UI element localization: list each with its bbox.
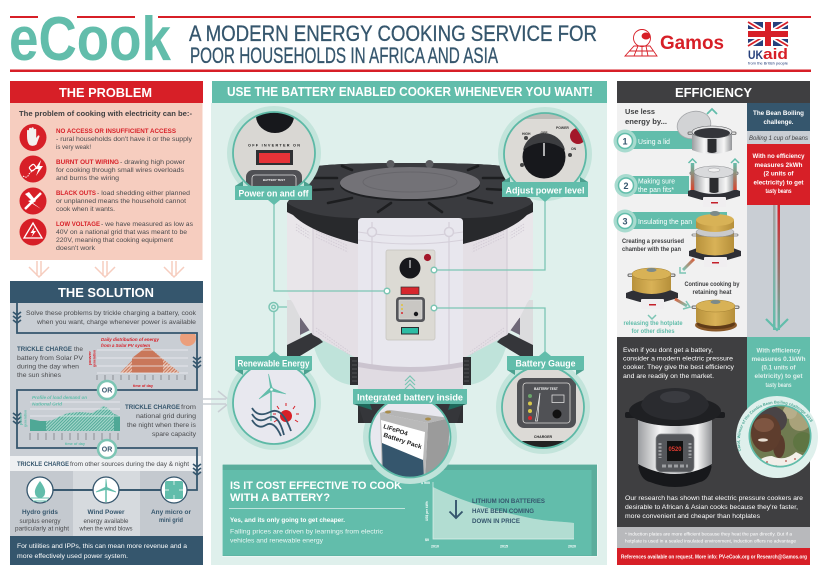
step 2: pan fits: the pan fits* xyxy=(638,187,674,194)
chart: solar distribution: from a Solar PV system xyxy=(101,343,150,348)
illustration: pan on trivet xyxy=(692,300,739,332)
illustration: cooker xyxy=(287,160,533,423)
box: with efficiency xyxy=(747,337,810,422)
text: research: more convenient and cheaper than hotplates xyxy=(625,513,761,520)
text: trickle grid: from xyxy=(181,404,197,411)
text: cost answer: Falling prices are driven by learnings from electric xyxy=(230,528,384,536)
text: trickle solar xyxy=(17,346,84,379)
box: with efficiency: tasty beans xyxy=(766,382,792,389)
logo: UK aid: UK xyxy=(748,48,763,62)
text: use less energy xyxy=(625,107,667,126)
label: hydro grids: particularly at night xyxy=(15,526,69,532)
badge: or xyxy=(98,381,116,399)
chevrons xyxy=(13,312,201,475)
text: lithium: HAVE BEEN COMING xyxy=(472,508,534,515)
text: low voltage xyxy=(56,221,194,252)
logo wordmark: eCook: eCook xyxy=(9,5,171,74)
callout: adjust power level: Adjust power level xyxy=(506,186,584,196)
text: no access: - rural households don't have it or the supply xyxy=(56,136,193,143)
heading: efficiency: EFFICIENCY xyxy=(675,86,753,100)
text: trickle solar: battery from Solar PV xyxy=(17,355,84,362)
callout: integrated battery xyxy=(353,389,467,484)
text: pressurised chamber xyxy=(622,239,684,253)
arrow: to retained heat xyxy=(680,259,694,273)
icon: down arrow xyxy=(450,500,462,518)
text: black outs: - load shedding either planned xyxy=(97,190,190,197)
text: lithium xyxy=(472,498,545,525)
arrow: energy reduction xyxy=(766,205,788,330)
box: no efficiency xyxy=(747,144,810,205)
text: other sources: TRICKLE CHARGE xyxy=(17,461,69,468)
step 3: insulating xyxy=(614,210,741,267)
connector: adjust xyxy=(431,197,545,273)
box: no efficiency: measures 2kWh xyxy=(754,162,803,169)
text: trickle grid: TRICKLE CHARGE xyxy=(125,404,180,411)
label: hydro grids: Hydro grids xyxy=(22,509,58,516)
text: cost answer: Yes, and its only going to get cheaper. xyxy=(230,517,345,524)
intro text xyxy=(26,310,197,326)
note: induction plates: hotplate is used in a sealed insulated environment, induction offers no advantage xyxy=(625,538,797,544)
text: burnt out wiring: and burns the wiring xyxy=(56,175,119,182)
text: pressure cooker intro: consider a modern electric pressure xyxy=(623,356,733,362)
arrow: to trivet xyxy=(675,299,690,309)
icon: wind and sun xyxy=(252,374,299,436)
text: use less energy: energy by... xyxy=(625,117,667,126)
text: pressurised chamber: Creating a pressurised xyxy=(622,239,684,245)
text: pressure cooker intro: and are readily on the market. xyxy=(623,373,714,380)
badge: or xyxy=(98,440,116,458)
chart: national grid demand: time of day xyxy=(65,441,86,446)
callout: battery gauge xyxy=(496,351,590,454)
headline: POOR HOUSEHOLDS IN AFRICA AND ASIA xyxy=(190,43,498,68)
icon: wind xyxy=(93,477,119,503)
step 2: pan fits: 2 xyxy=(623,181,629,191)
headline xyxy=(189,21,597,68)
text: cost answer xyxy=(230,517,384,544)
chart: battery price: US$ per kWh xyxy=(425,501,429,521)
text: other sources xyxy=(17,461,189,468)
arrow: into renewable xyxy=(203,391,231,412)
illustration: electric pressure cooker: 0520 xyxy=(668,446,682,453)
connector: renewable xyxy=(269,302,287,356)
side vents xyxy=(296,224,524,355)
note: induction plates xyxy=(617,527,810,548)
intro text: when you want, charge whenever power is available xyxy=(36,319,196,326)
connector xyxy=(53,489,161,491)
icon: hydro xyxy=(27,477,53,503)
step 2: pan fits: Making sure xyxy=(638,178,675,186)
text: burnt out wiring: for cooking through small wires overloads xyxy=(56,167,185,174)
photo: bean boiling winner: Carol, Winner of the Zambia Bean Boiling challenge 2018 xyxy=(736,400,813,452)
text: research xyxy=(625,495,803,520)
label: wind power: energy available xyxy=(84,518,129,525)
panel: the solution xyxy=(10,281,203,565)
box: with efficiency: With efficiency xyxy=(756,348,801,354)
text: no access: is very weak! xyxy=(56,144,91,151)
chart: battery price: 2015 xyxy=(500,544,508,548)
box: no efficiency: (2 units of xyxy=(764,170,794,178)
heading: the problem: THE PROBLEM xyxy=(59,86,152,100)
text: use less energy: Use less xyxy=(625,107,655,116)
label: hydro grids: surplus energy xyxy=(20,518,61,525)
footer: utilities xyxy=(10,536,203,565)
text: trickle solar: TRICKLE CHARGE xyxy=(17,346,72,353)
text: continue cooking: Continue cooking by xyxy=(684,282,740,288)
callout: adjust power level: ON xyxy=(571,147,577,151)
box: no efficiency: tasty beans xyxy=(766,188,792,195)
panel: cooker xyxy=(203,81,607,565)
text: pressure cooker intro: Even if you dont get a battery, xyxy=(623,347,713,354)
text: bean challenge: challenge. xyxy=(764,119,794,126)
text: research: desirable to African & Asian cooks because they're faster, xyxy=(625,504,798,511)
chart: solar distribution: generation xyxy=(92,349,96,367)
icon: burnt wire xyxy=(20,156,46,182)
text: other sources: from other sources during the day & night xyxy=(70,461,189,468)
text: trickle grid: spare capacity xyxy=(152,431,197,438)
callout: battery gauge: BATTERY TEST xyxy=(534,387,558,391)
step 3: insulating: 3 xyxy=(622,216,628,226)
text: pressure cooker intro xyxy=(623,347,735,380)
illustration: retained heat pan xyxy=(626,268,678,309)
icon: low voltage xyxy=(20,218,46,246)
band: other sources xyxy=(10,456,201,471)
photo: bean boiling winner xyxy=(736,396,818,478)
footer: utilities: more effectively used power system. xyxy=(17,553,128,560)
panel: the problem xyxy=(10,81,203,260)
chevrons: battery up xyxy=(405,376,415,389)
chart: solar distribution: power xyxy=(88,350,92,365)
text: trickle grid xyxy=(125,404,197,438)
illustration: insulated pan xyxy=(689,211,741,267)
label: hydro grids xyxy=(15,509,69,532)
text: pressurised chamber: chamber with the pan xyxy=(622,247,681,253)
text: trickle solar: the xyxy=(74,346,83,353)
heading: cost effective: WITH A BATTERY? xyxy=(230,492,330,504)
logo: UK aid: aid xyxy=(763,46,788,63)
callout: power on and off xyxy=(227,99,321,205)
chart: battery price: 2010 xyxy=(431,544,439,548)
text: burnt out wiring: BURNT OUT WIRING xyxy=(56,159,119,166)
step 1: using a lid xyxy=(614,108,736,154)
callout: adjust power level: OFF xyxy=(541,131,547,135)
label: micro grid: mini grid xyxy=(159,517,183,524)
text: black outs: BLACK OUTS xyxy=(56,190,97,197)
illustration: pan on hob xyxy=(688,159,740,207)
logo: Gamos xyxy=(625,30,724,56)
chart: national grid demand: generation xyxy=(24,409,28,427)
text: cost answer: vehicles and renewable energy xyxy=(230,538,324,544)
text: continue cooking xyxy=(684,282,740,296)
connector: gauge xyxy=(431,305,545,356)
text: pressure cooker intro: cooker. They give the best efficiency xyxy=(623,364,735,371)
flow line xyxy=(17,303,197,490)
badge: or: OR xyxy=(102,446,112,454)
box: with efficiency: eletricity) to get xyxy=(754,373,803,380)
callout: power on and off: BATTERY TEST xyxy=(263,178,285,182)
intro text: The problem of cooking with electricity can be:- xyxy=(19,109,193,118)
callout: integrated battery: Battery Pack xyxy=(382,432,423,451)
text: black outs: or unplanned means the household cannot xyxy=(56,198,186,205)
badge: or: OR xyxy=(102,388,112,394)
chart: national grid demand: Profile of load demand on xyxy=(32,395,87,400)
text: continue cooking: retaining heat xyxy=(692,290,732,296)
text: no access xyxy=(56,128,193,151)
chart: national grid demand xyxy=(19,395,120,446)
heading: cost effective xyxy=(230,480,402,504)
chart: solar distribution: time of day xyxy=(133,383,154,388)
logo: UK aid xyxy=(748,22,788,66)
control panel xyxy=(386,250,435,340)
callout: adjust power level xyxy=(498,107,592,202)
icon: micro grid xyxy=(161,477,187,503)
logo: UK aid: from the British people xyxy=(748,62,788,66)
label: micro grid: Any micro or xyxy=(151,509,191,516)
title xyxy=(9,5,811,74)
box: no efficiency: With no efficiency xyxy=(752,153,805,160)
chart: national grid demand: power xyxy=(19,412,23,425)
callout: adjust power level: HIGH xyxy=(522,132,531,136)
text: releasing the hotplate xyxy=(624,321,683,335)
text: trickle solar: the sun shines xyxy=(17,372,62,379)
chart: battery price xyxy=(421,481,576,548)
footer: references xyxy=(617,548,810,565)
text: low voltage: LOW VOLTAGE xyxy=(56,221,101,228)
icon: black out xyxy=(20,188,46,214)
panel: efficiency xyxy=(614,81,810,337)
label: wind power: Wind Power xyxy=(88,509,125,516)
text: black outs xyxy=(56,190,190,213)
callout: renewable energy xyxy=(227,351,321,450)
source cell backgrounds xyxy=(10,471,203,536)
text: low voltage: 220V, meaning that cooking equipment xyxy=(56,237,173,244)
heading: the solution: THE SOLUTION xyxy=(58,286,154,300)
footer: references: References available on request. More info: PV-eCook.org or Research@Gamos.org xyxy=(621,554,807,560)
chart: national grid demand: National Grid xyxy=(32,402,62,406)
text: black outs: cook when it wants. xyxy=(56,206,115,213)
heading: cost effective: IS IT COST EFFECTIVE TO COOK xyxy=(230,480,402,492)
callout: power on and off: Power on and off xyxy=(238,188,309,198)
callout: battery gauge: CHARGER xyxy=(534,435,552,439)
text: releasing the hotplate: releasing the hotplate xyxy=(624,321,683,327)
illustration: pan with lid xyxy=(674,108,736,154)
text: trickle grid: the night when there is xyxy=(127,422,197,429)
chart: solar distribution: Daily distribution of energy xyxy=(101,337,159,342)
step 3: insulating: Insulating the pan xyxy=(638,219,692,226)
text: bean challenge xyxy=(753,110,804,126)
step 1: using a lid: Using a lid xyxy=(638,139,670,146)
text: releasing the hotplate: for other dishes xyxy=(632,329,675,335)
box: no efficiency: electricity) to get xyxy=(754,180,804,186)
footer: utilities: For utilities and IPPs, this can mean more revenue and a xyxy=(17,543,187,550)
step 2: pan fits xyxy=(614,159,740,207)
box: with efficiency: (0.1 units of xyxy=(762,364,796,372)
text: burnt out wiring xyxy=(56,159,186,182)
chart: battery price: $ 900 xyxy=(421,481,430,485)
connector: power xyxy=(274,200,390,294)
text: low voltage: 40V on a national grid that was meant to be xyxy=(56,229,187,236)
label: micro grid xyxy=(151,509,191,524)
column: bean boiling xyxy=(747,103,810,337)
text: trickle solar: during the day when xyxy=(17,364,79,370)
callout: power on and off: OFF INVERTER ON xyxy=(248,144,300,148)
box: with efficiency: measures 0.1kWh xyxy=(752,356,806,363)
callout: integrated battery: Integrated battery inside xyxy=(357,392,463,402)
note: induction plates: * Induction plates are more efficient because they heat the pan directly. But if a xyxy=(625,532,793,536)
arrow: release hotplate xyxy=(648,310,656,319)
callout: renewable energy: Renewable Energy xyxy=(238,358,310,368)
text: low voltage: - we have measured as low as xyxy=(101,221,194,228)
label: wind power xyxy=(79,509,133,532)
label: wind power: when the wind blows xyxy=(79,526,133,532)
callout: integrated battery: LiFePO4 xyxy=(382,423,409,438)
chart: battery price: 2020 xyxy=(568,544,576,548)
callout: adjust power level: POWER xyxy=(556,126,569,130)
text: boiling cup: Boiling 1 cup of beans xyxy=(749,136,808,142)
text: trickle grid: national grid during xyxy=(136,413,196,420)
text: no access: NO ACCESS OR INSUFFICIENT ACCESS xyxy=(56,128,177,135)
step 1: using a lid: 1 xyxy=(622,136,628,146)
callout: battery gauge: Battery Gauge xyxy=(516,358,576,368)
panel: pressure cooker xyxy=(617,337,818,527)
heading: cooker: USE THE BATTERY ENABLED COOKER WHENEVER YOU WANT! xyxy=(227,84,593,99)
text: low voltage: doesn't work xyxy=(56,245,96,252)
chart: battery price: $0 xyxy=(425,538,429,542)
logo: Gamos: Gamos xyxy=(660,32,724,54)
text: lithium: DOWN IN PRICE xyxy=(472,518,520,525)
headline: A MODERN ENERGY COOKING SERVICE FOR xyxy=(189,21,597,46)
arrows: problem to solution xyxy=(29,261,184,277)
text: burnt out wiring: - drawing high power xyxy=(120,159,186,166)
text: lithium: LITHIUM ION BATTERIES xyxy=(472,498,545,505)
text: bean challenge: The Bean Boiling xyxy=(753,110,804,117)
chart: solar distribution xyxy=(88,330,196,388)
illustration: electric pressure cooker xyxy=(625,388,725,487)
panel: cost effective xyxy=(222,464,598,556)
icon: hand xyxy=(20,124,46,151)
text: research: Our research has shown that electric pressure cookers are xyxy=(625,495,803,502)
intro text: Solve these problems by trickle charging a battery, cook xyxy=(26,310,197,317)
